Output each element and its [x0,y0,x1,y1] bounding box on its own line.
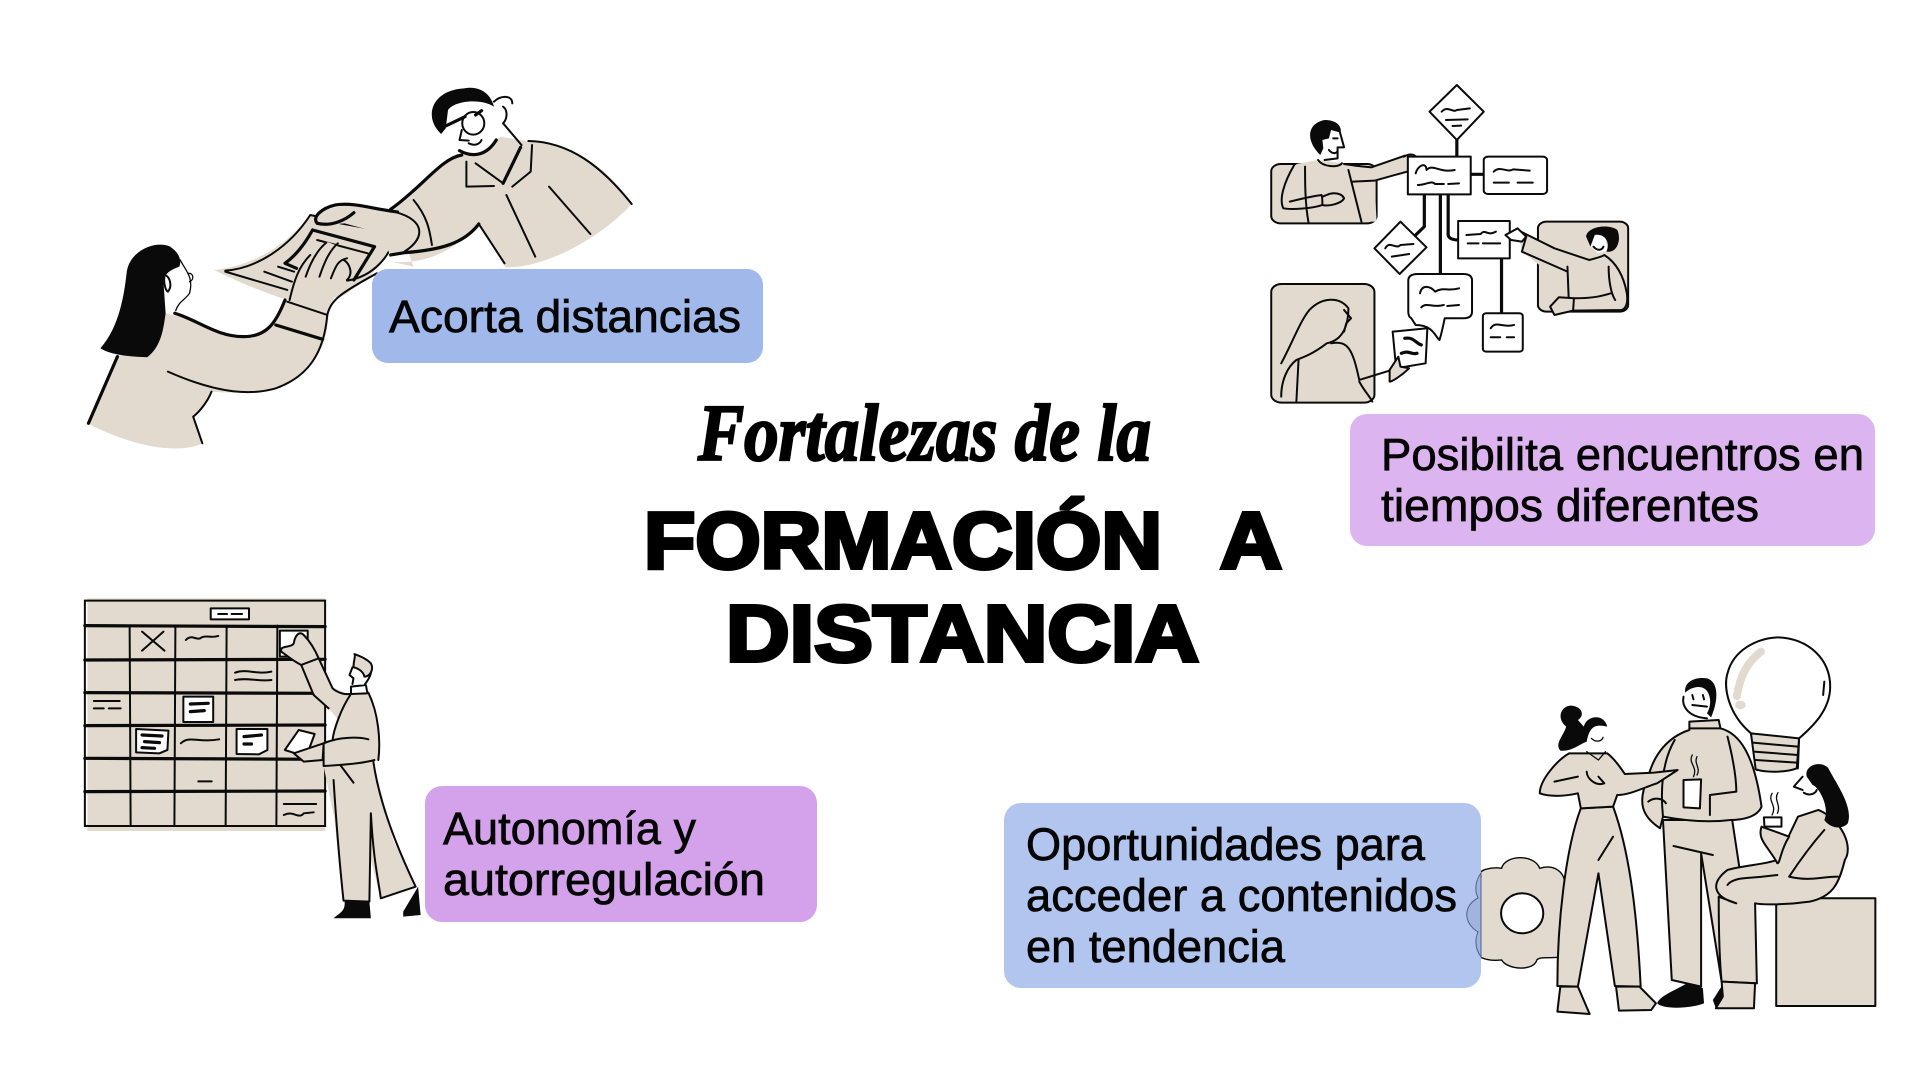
box: Posibilita encuentros en tiempos diferentes: tiempos diferentes [1381,480,1759,531]
box: Autonomía y autorregulación [425,786,817,922]
box: Oportunidades para acceder a contenidos en tendencia: en tendencia [1026,921,1286,972]
box: Oportunidades para acceder a contenidos en tendencia: acceder a contenidos [1026,870,1457,921]
title: script line: Fortalezas de la [697,390,1151,478]
title: first bold line letter A: A [1220,496,1282,585]
title [644,390,1282,678]
title: second bold line: DISTANCIA [726,589,1199,678]
box: Acorta distancias [372,269,763,363]
title: first bold line word: FORMACIÓN [644,496,1162,585]
box: Autonomía y autorregulación: autorregulación [443,854,765,905]
box: Oportunidades para acceder a contenidos en tendencia [1004,803,1481,988]
illustration: team with light bulb and gear [1465,637,1875,1014]
illustration: two people exchanging a document [88,88,632,448]
illustration: flowchart with remote collaborators [1271,85,1628,403]
icon: gear [1465,858,1565,968]
box: Posibilita encuentros en tiempos diferentes [1350,414,1875,546]
box: Oportunidades para acceder a contenidos en tendencia: Oportunidades para [1026,819,1426,870]
box: Autonomía y autorregulación: Autonomía y [443,803,696,854]
box: Acorta distancias: Acorta distancias [389,291,741,342]
gear lobe seen through the box [1467,873,1481,957]
box: Posibilita encuentros en tiempos diferentes: Posibilita encuentros en [1381,429,1864,480]
illustration: person working on a wall calendar [85,598,421,918]
